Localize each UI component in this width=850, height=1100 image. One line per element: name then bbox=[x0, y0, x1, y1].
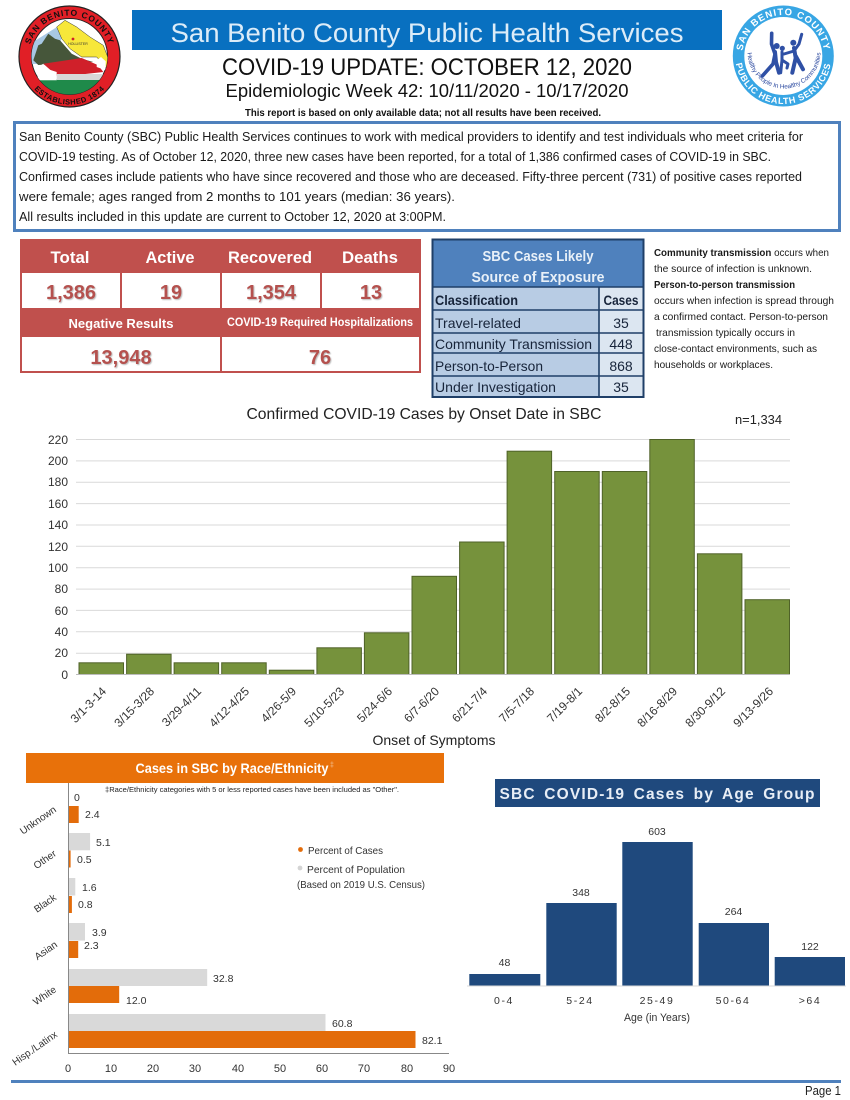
bar chart: cases by age group bbox=[467, 826, 846, 1007]
bar chart: cases by onset date: 3/15-3/28 bbox=[111, 684, 157, 730]
bar chart: race and ethnicity: Hisp./Latinx bbox=[11, 1029, 60, 1068]
bar chart: cases by onset date: 220 bbox=[48, 433, 68, 447]
bar chart: cases by onset date: 100 bbox=[48, 561, 68, 575]
logo: San Benito County seal bbox=[18, 5, 121, 108]
logo: San Benito County seal: HOLLISTER bbox=[68, 42, 88, 46]
panel: case totals table: Total bbox=[50, 248, 90, 267]
legend: race and ethnicity: Percent of Cases bbox=[308, 845, 383, 857]
page number: Page 1 bbox=[805, 1083, 841, 1098]
panel: likely source of exposure table: Under Investigation bbox=[435, 379, 556, 395]
report title: COVID-19 UPDATE: OCTOBER 12, 2020 bbox=[222, 54, 632, 81]
panel: case totals table: 19 bbox=[160, 282, 182, 304]
bar chart: cases by onset date: 3/29-4/11 bbox=[159, 684, 204, 729]
race and ethnicity heading: Cases in SBC by Race/Ethnicity bbox=[136, 760, 329, 776]
panel: summary text: All results included in this update are current to October 12, 2020 at 3:00PM. bbox=[19, 209, 446, 224]
bar chart: cases by age group: 603 bbox=[648, 826, 666, 838]
x axis title: onset of symptoms: Onset of Symptoms bbox=[372, 732, 496, 748]
sample size note: n=1,334 bbox=[735, 412, 782, 427]
bar chart: race and ethnicity: Unknown bbox=[18, 804, 59, 837]
legend: race and ethnicity: (Based on 2019 U.S. Census) bbox=[297, 879, 425, 891]
panel: likely source of exposure table: 448 bbox=[609, 336, 633, 352]
panel: case totals table: 13 bbox=[360, 282, 382, 304]
bar chart: cases by onset date: 180 bbox=[48, 475, 68, 489]
logo: Public Health Services seal: SAN BENITO COUNTY bbox=[736, 8, 830, 50]
bar chart: race and ethnicity: 12.0 bbox=[126, 995, 147, 1007]
bar chart: cases by age group: 264 bbox=[725, 906, 742, 918]
text block: transmission definitions bbox=[654, 247, 834, 371]
logo: Public Health Services seal: Healthy People In Healthy Communities bbox=[748, 52, 820, 89]
panel: likely source of exposure table: Classification bbox=[435, 292, 518, 308]
panel: case totals table: 13,948 bbox=[90, 347, 152, 369]
bar chart: race and ethnicity: White bbox=[31, 984, 59, 1008]
bar chart: cases by age group: 348 bbox=[572, 887, 590, 899]
panel: case totals table: Active bbox=[146, 248, 194, 267]
bar chart: cases by onset date: 20 bbox=[55, 646, 68, 660]
age group heading bbox=[495, 779, 820, 807]
bar chart: cases by onset date: 8/2-8/15 bbox=[592, 684, 633, 725]
logo: San Benito County seal: SAN BENITO COUNTY bbox=[25, 10, 114, 44]
panel: summary text: Confirmed cases include patients who have since recovered and those who are deceased. Fifty-three percent (731) of positive cases reported bbox=[19, 169, 802, 184]
bar chart: cases by onset date: 80 bbox=[55, 582, 68, 596]
logo: Public Health Services seal: PUBLIC HEALTH SERVICES bbox=[736, 62, 830, 104]
panel: summary text: COVID-19 testing. As of October 12, 2020, three new cases have been reported, for a total of 1,386 confirmed cases of COVID-19 in SBC. bbox=[19, 149, 771, 164]
bar chart: cases by onset date: 7/5-7/18 bbox=[496, 684, 537, 725]
text block: transmission definitions: transmission typically occurs in bbox=[656, 327, 795, 339]
bar chart: race and ethnicity: 40 bbox=[232, 1063, 244, 1075]
text block: transmission definitions: close-contact environments, such as bbox=[654, 343, 817, 355]
bar chart: race and ethnicity bbox=[11, 783, 455, 1075]
bar chart: cases by onset date: 200 bbox=[48, 454, 68, 468]
panel: likely source of exposure table: Community Transmission bbox=[435, 336, 592, 352]
panel: case totals table: 1,386 bbox=[46, 282, 96, 304]
bar chart: cases by onset date: 6/21-7/4 bbox=[449, 684, 490, 725]
panel: likely source of exposure table: 35 bbox=[613, 379, 629, 395]
bar chart: cases by age group: 5-24 bbox=[566, 995, 594, 1007]
text block: transmission definitions: Community transmission occurs when bbox=[654, 247, 829, 259]
bar chart: race and ethnicity: Black bbox=[32, 892, 60, 915]
bar chart: cases by onset date: 160 bbox=[48, 497, 68, 511]
bar chart: cases by onset date: 120 bbox=[48, 540, 68, 554]
panel: likely source of exposure table: SBC Cases Likely bbox=[482, 248, 594, 265]
bar chart: race and ethnicity: 2.3 bbox=[84, 940, 99, 952]
panel: likely source of exposure table: 35 bbox=[613, 315, 629, 331]
bar chart: race and ethnicity: 0 bbox=[74, 792, 80, 804]
age group heading: SBC COVID-19 Cases by Age Group bbox=[500, 786, 814, 803]
bar chart: cases by onset date: 4/26-5/9 bbox=[258, 684, 299, 725]
bar chart: race and ethnicity: Other bbox=[32, 848, 59, 872]
bar chart: cases by age group: 25-49 bbox=[640, 995, 674, 1007]
bar chart: race and ethnicity: 60.8 bbox=[332, 1018, 353, 1030]
text block: transmission definitions: occurs when infection is spread through bbox=[654, 295, 834, 307]
panel: likely source of exposure table: Cases bbox=[604, 292, 639, 308]
chart title: cases by onset date: Confirmed COVID-19 Cases by Onset Date in SBC bbox=[246, 406, 602, 423]
bar chart: race and ethnicity: 1.6 bbox=[82, 882, 97, 894]
text block: transmission definitions: Person-to-person transmission bbox=[654, 279, 795, 291]
bar chart: cases by onset date: 5/10-5/23 bbox=[301, 684, 347, 730]
epidemiologic week subtitle: Epidemiologic Week 42: 10/11/2020 - 10/17/2020 bbox=[226, 81, 628, 101]
panel: case totals table: 76 bbox=[309, 347, 331, 369]
bar chart: cases by onset date: 140 bbox=[48, 518, 68, 532]
race and ethnicity heading: ‡ bbox=[330, 762, 334, 769]
bar chart: cases by onset date: 9/13-9/26 bbox=[730, 684, 776, 730]
bar chart: cases by onset date: 60 bbox=[55, 604, 68, 618]
bar chart: race and ethnicity: 3.9 bbox=[92, 927, 107, 939]
panel: summary text: were female; ages ranged from 2 months to 101 years (median: 36 years). bbox=[18, 189, 455, 204]
bar chart: race and ethnicity: 5.1 bbox=[96, 837, 111, 849]
panel: likely source of exposure table: Person-to-Person bbox=[435, 358, 543, 374]
bar chart: race and ethnicity: 2.4 bbox=[85, 809, 100, 821]
header banner: San Benito County Public Health Services bbox=[170, 18, 684, 48]
legend: race and ethnicity: Percent of Population bbox=[307, 864, 405, 876]
logo: Public Health Services seal bbox=[732, 6, 834, 106]
bar chart: race and ethnicity: 80 bbox=[401, 1063, 413, 1075]
panel: case totals table: 1,354 bbox=[246, 282, 297, 304]
bar chart: race and ethnicity: 10 bbox=[105, 1063, 117, 1075]
bar chart: cases by age group: 50-64 bbox=[716, 995, 750, 1007]
bar chart: cases by onset date: 8/16-8/29 bbox=[634, 684, 680, 730]
panel: case totals table: COVID-19 Required Hospitalizations bbox=[227, 317, 413, 329]
panel: likely source of exposure table bbox=[432, 239, 644, 397]
bar chart: cases by onset date: 8/30-9/12 bbox=[682, 684, 728, 730]
panel: case totals table bbox=[20, 239, 421, 373]
panel: summary text bbox=[14, 122, 840, 230]
text block: transmission definitions: the source of infection is unknown. bbox=[654, 263, 812, 275]
bar chart: race and ethnicity: 60 bbox=[316, 1063, 328, 1075]
panel: likely source of exposure table: Travel-related bbox=[435, 315, 521, 331]
bar chart: race and ethnicity: 20 bbox=[147, 1063, 159, 1075]
panel: likely source of exposure table: 868 bbox=[609, 358, 633, 374]
panel: case totals table: Recovered bbox=[228, 248, 312, 267]
bar chart: cases by onset date: 0 bbox=[61, 668, 68, 682]
panel: summary text: San Benito County (SBC) Public Health Services continues to work with medical providers to identify and test individuals who meet criteria for bbox=[19, 129, 804, 144]
bar chart: race and ethnicity: 32.8 bbox=[213, 973, 234, 985]
logo: San Benito County seal: ESTABLISHED 1874 bbox=[34, 86, 104, 105]
panel: likely source of exposure table: Source of Exposure bbox=[472, 269, 604, 286]
bar chart: race and ethnicity: 0 bbox=[65, 1063, 71, 1075]
bar chart: race and ethnicity: 50 bbox=[274, 1063, 286, 1075]
bar chart: cases by age group: 48 bbox=[499, 957, 510, 969]
bar chart: race and ethnicity: 90 bbox=[443, 1063, 455, 1075]
bar chart: cases by onset date: 7/19-8/1 bbox=[544, 684, 585, 725]
race and ethnicity footnote: ‡Race/Ethnicity categories with 5 or less reported cases have been included as "Other". bbox=[105, 785, 399, 794]
bar chart: race and ethnicity: 70 bbox=[358, 1063, 370, 1075]
panel: case totals table: Deaths bbox=[342, 248, 398, 267]
bar chart: cases by onset date: 4/12-4/25 bbox=[206, 684, 252, 730]
bar chart: cases by onset date: 3/1-3-14 bbox=[68, 684, 109, 726]
header banner bbox=[132, 10, 722, 50]
text block: transmission definitions: households or workplaces. bbox=[654, 359, 773, 371]
bar chart: race and ethnicity: 82.1 bbox=[422, 1035, 443, 1047]
bar chart: race and ethnicity: 30 bbox=[189, 1063, 201, 1075]
bar chart: cases by onset date bbox=[48, 433, 790, 730]
legend: race and ethnicity bbox=[297, 845, 425, 891]
bar chart: race and ethnicity: 0.8 bbox=[78, 899, 93, 911]
panel: case totals table: Negative Results bbox=[68, 316, 174, 331]
bar chart: cases by onset date: 6/7-6/20 bbox=[401, 684, 442, 725]
bar chart: race and ethnicity: 0.5 bbox=[77, 854, 92, 866]
text block: transmission definitions: a confirmed contact. Person-to-person bbox=[654, 311, 828, 323]
bar chart: cases by age group: 122 bbox=[801, 941, 819, 953]
x axis title: age in years: Age (in Years) bbox=[624, 1012, 690, 1024]
data availability note: This report is based on only available data; not all results have been received. bbox=[245, 108, 601, 119]
bar chart: cases by age group: 0-4 bbox=[494, 995, 514, 1007]
bar chart: race and ethnicity: Asian bbox=[33, 939, 60, 963]
bar chart: cases by onset date: 5/24-6/6 bbox=[354, 684, 395, 725]
bar chart: cases by onset date: 40 bbox=[55, 625, 68, 639]
race and ethnicity heading bbox=[26, 753, 444, 783]
bar chart: cases by age group: >64 bbox=[799, 995, 821, 1007]
